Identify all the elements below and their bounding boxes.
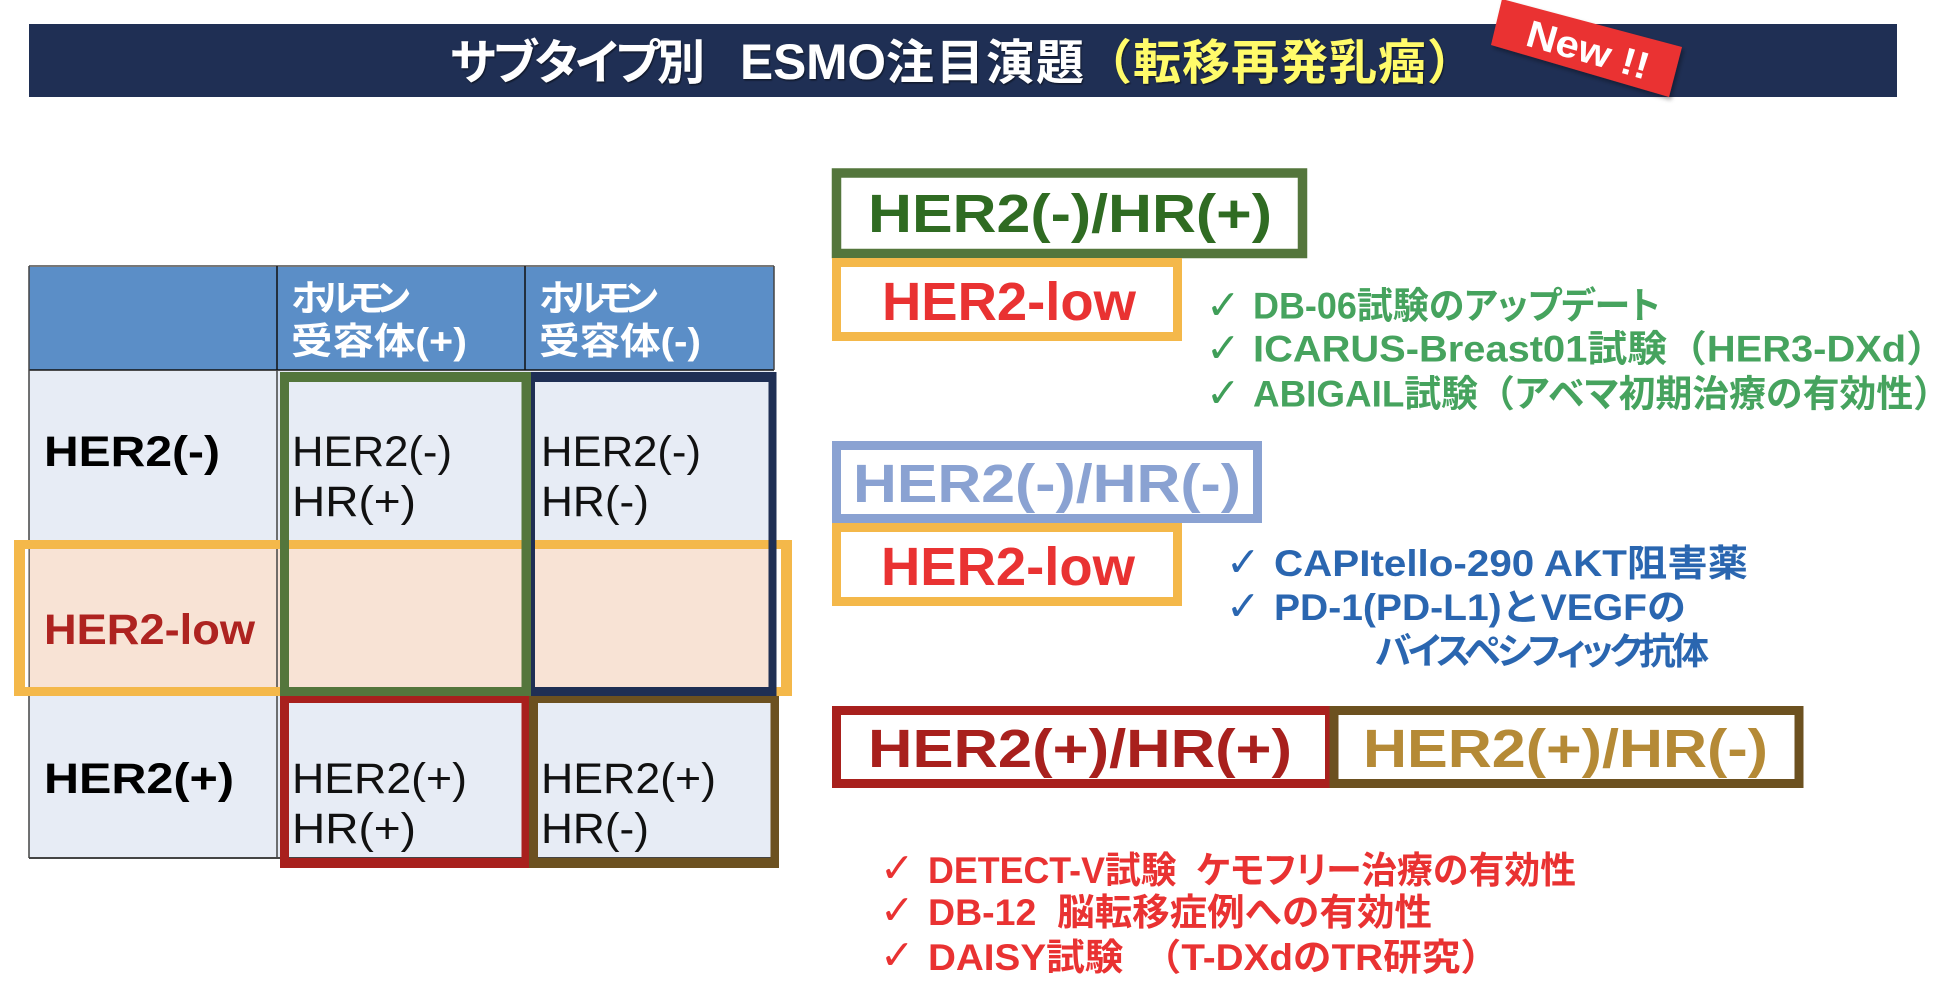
- title text white: ESMO: [740, 34, 886, 90]
- cell HER2(-) HR(+): HER2(-): [292, 428, 452, 476]
- header: hormone receptor positive: [291, 278, 467, 362]
- label box HER2-low: HER2-low: [882, 272, 1137, 332]
- row label HER2(+): HER2(+): [44, 755, 234, 803]
- label box HER2(+)/HR(-): [1334, 710, 1799, 784]
- table header row: [29, 266, 774, 370]
- blue trial list: ✓: [1226, 538, 1260, 586]
- New ribbon: [1491, 0, 1682, 97]
- green trial list: ✓: [1206, 369, 1240, 417]
- label box HER2(-)/HR(-): [836, 446, 1258, 518]
- green trial list: ICARUS-Breast01試験（HER3-DXd）: [1253, 328, 1940, 370]
- header: hormone receptor negative: 受容体(-): [539, 321, 701, 362]
- cell HER2(-) HR(+): [292, 428, 452, 526]
- title text white: 注目演題: [886, 37, 1084, 90]
- title text yellow: （転移再発乳癌）: [1084, 37, 1475, 90]
- red frame HER2(+)/HR(+): [280, 696, 529, 868]
- cell HER2(+) HR(+): HR(+): [292, 805, 416, 853]
- green trial list: DB-06試験のアップデート: [1253, 284, 1660, 326]
- label box HER2(-)/HR(+): HER2(-)/HR(+): [868, 184, 1272, 244]
- blue trial list: バイスペシフィック抗体: [1375, 631, 1709, 672]
- cell HER2(+) HR(-): HER2(+): [541, 755, 716, 803]
- red trial list: DB-12 脳転移症例への有効性: [928, 892, 1432, 933]
- row label HER2(-): HER2(-): [44, 428, 220, 476]
- cell HER2(+) HR(+): [292, 755, 467, 853]
- subtype matrix table: [14, 266, 792, 868]
- green trial list: [1206, 281, 1940, 417]
- label box HER2(+)/HR(+): [836, 710, 1330, 784]
- section: HER2(+): [836, 710, 1799, 979]
- blue trial list: ✓: [1226, 582, 1260, 630]
- cell HER2(-) HR(+): HR(+): [292, 478, 416, 526]
- header: hormone receptor positive: ホルモン: [291, 278, 410, 319]
- red trial list: ✓: [880, 844, 914, 892]
- header: hormone receptor negative: ホルモン: [539, 278, 658, 319]
- navy frame HER2(-)/HR(-): [531, 372, 776, 696]
- red trial list: ✓: [880, 886, 914, 934]
- red trial list: ✓: [880, 931, 914, 979]
- HER2-low highlight frame: [14, 540, 792, 696]
- cell HER2(+) HR(-): HR(-): [541, 805, 649, 853]
- green trial list: ABIGAIL試験（アベマ初期治療の有効性）: [1253, 374, 1940, 414]
- row label HER2-low: HER2-low: [44, 606, 256, 654]
- blue trial list: [1226, 538, 1748, 672]
- red trial list: DAISY試験 （T-DXdのTR研究）: [928, 937, 1499, 978]
- label box HER2-low: [836, 262, 1178, 336]
- brown frame HER2(+)/HR(-): [529, 696, 779, 868]
- title banner: [29, 24, 1897, 97]
- cell HER2(+) HR(+): HER2(+): [292, 755, 467, 803]
- cell HER2(-) HR(-): HR(-): [541, 478, 649, 526]
- section: HER2(-)/HR(-): [836, 446, 1748, 672]
- green frame HER2(-)/HR(+): [280, 372, 531, 696]
- label box HER2(-)/HR(-): HER2(-)/HR(-): [853, 454, 1241, 514]
- blue trial list: PD-1(PD-L1)とVEGFの: [1274, 587, 1686, 628]
- label box HER2-low: [836, 528, 1178, 602]
- label box HER2(-)/HR(+): [836, 173, 1302, 254]
- green trial list: ✓: [1206, 281, 1240, 329]
- table body rows: [29, 370, 774, 858]
- red trial list: [880, 844, 1576, 979]
- section: HER2(-)/HR(+): [836, 173, 1940, 417]
- cell HER2(-) HR(-): [541, 428, 701, 526]
- label box HER2(+)/HR(+): HER2(+)/HR(+): [868, 719, 1292, 779]
- red trial list: DETECT-V試験 ケモフリー治療の有効性: [928, 850, 1576, 891]
- cell HER2(-) HR(-): HER2(-): [541, 428, 701, 476]
- title text white: [450, 34, 1084, 90]
- header: hormone receptor positive: 受容体(+): [291, 321, 467, 362]
- label box HER2(+)/HR(-): HER2(+)/HR(-): [1363, 719, 1768, 779]
- title text white: サブタイプ別: [450, 37, 705, 90]
- label box HER2-low: HER2-low: [881, 537, 1136, 597]
- blue trial list: CAPItello-290 AKT阻害薬: [1274, 543, 1748, 584]
- cell HER2(+) HR(-): [541, 755, 716, 853]
- green trial list: ✓: [1206, 324, 1240, 372]
- New ribbon: New !!: [1522, 13, 1654, 88]
- header: hormone receptor negative: [539, 278, 701, 362]
